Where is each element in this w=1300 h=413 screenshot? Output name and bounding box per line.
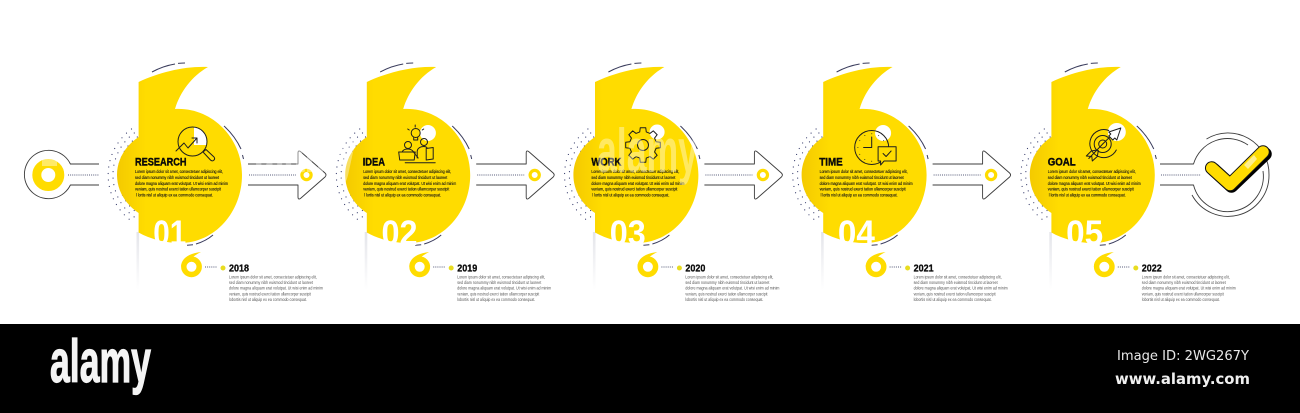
body text: Lorem ipsum dolor sit amet, consectetuer adipiscing elit, <box>820 169 908 174</box>
panel: work <box>565 63 782 302</box>
number: 01 <box>153 214 186 253</box>
small six marker <box>409 252 454 274</box>
heading: WORK <box>591 156 621 168</box>
heading: TIME <box>819 156 843 168</box>
dotted arcs <box>1021 129 1050 221</box>
description: Lorem ipsum dolor sit amet, consectetuer adipiscing elit, <box>685 274 773 279</box>
description: Lorem ipsum dolor sit amet, consectetuer adipiscing elit, <box>457 274 545 279</box>
dotted arcs <box>793 129 822 221</box>
footer logo: alamy <box>50 328 151 395</box>
description <box>229 274 323 302</box>
description: sed diam nonummy nibh euismod tincidunt ut laoreet <box>914 280 998 285</box>
yellow speech shape <box>117 67 242 243</box>
accent arcs <box>152 63 244 245</box>
website: www.alamy.com <box>1115 370 1250 388</box>
panel: time <box>793 63 1011 302</box>
arrow <box>933 151 1011 199</box>
body text: sed diam nonummy nibh euismod tincidunt ut laoreet <box>591 175 676 180</box>
watermark: alamy <box>597 117 698 186</box>
description: veniam, quis nostrud exerci tation ullamcorper suscipit <box>914 291 996 296</box>
accent arcs <box>837 63 928 245</box>
description: Lorem ipsum dolor sit amet, consectetuer adipiscing elit, <box>914 274 1002 279</box>
panel: research <box>108 63 326 302</box>
body text: dolore magna aliquam erat volutpat. Ut wisi enim ad minim <box>363 181 456 186</box>
body text: l lortis nisl ut aliquip ex ea commodo consequat. <box>1049 192 1126 197</box>
description: dolore magna aliquam erat volutpat. Ut wisi enim ad minim <box>685 286 780 291</box>
description: Lorem ipsum dolor sit amet, consectetuer adipiscing elit, <box>229 274 317 279</box>
body text: l lortis nisl ut aliquip ex ea commodo consequat. <box>364 192 441 197</box>
description: veniam, quis nostrud exerci tation ullamcorper suscipit <box>229 291 312 296</box>
description: dolore magna aliquam erat volutpat. Ut wisi enim ad minim <box>1142 286 1236 291</box>
body text <box>135 169 228 197</box>
year: 2020 <box>685 264 706 274</box>
year: 2021 <box>914 264 934 274</box>
icon: clock with chat check <box>855 125 896 165</box>
fading edge shadow <box>593 232 596 290</box>
number: 05 <box>1066 214 1103 253</box>
accent arcs <box>608 63 700 245</box>
description: sed diam nonummy nibh euismod tincidunt ut laoreet <box>457 280 542 285</box>
yellow speech shape <box>345 67 470 243</box>
end node: check mark <box>1160 133 1269 216</box>
accent arcs <box>380 63 472 245</box>
description: Lorem ipsum dolor sit amet, consectetuer adipiscing elit, <box>1142 274 1230 279</box>
yellow speech shape <box>802 67 927 243</box>
description: veniam, quis nostrud exerci tation ullamcorper suscipit <box>1142 291 1224 296</box>
year: 2022 <box>1142 264 1162 274</box>
start node <box>24 150 99 199</box>
body text: sed diam nonummy nibh euismod tincidunt ut laoreet <box>363 175 448 180</box>
description <box>457 274 552 302</box>
arrow <box>248 151 326 199</box>
body text: Lorem ipsum dolor sit amet, consectetuer adipiscing elit, <box>591 169 679 174</box>
icon: team with idea bulb <box>399 125 436 163</box>
description: veniam, quis nostrud exerci tation ullamcorper suscipit <box>685 291 768 296</box>
dotted arcs <box>108 129 137 221</box>
year: 2018 <box>229 264 249 274</box>
icon: magnifier with chart <box>176 127 215 161</box>
body text <box>820 169 913 197</box>
body text: sed diam nonummy nibh euismod tincidunt ut laoreet <box>1048 175 1132 180</box>
body text <box>591 169 685 197</box>
arrow <box>476 151 554 199</box>
year: 2019 <box>457 264 478 274</box>
number: 03 <box>610 214 646 253</box>
fading edge shadow <box>136 232 139 290</box>
body text: l lortis nisl ut aliquip ex ea commodo consequat. <box>592 192 669 197</box>
arrow <box>704 151 782 199</box>
description: lobortis nisl ut aliquip ex ea commodo consequat. <box>457 297 535 302</box>
description <box>1142 274 1236 302</box>
body text: dolore magna aliquam erat volutpat. Ut wisi enim ad minim <box>135 181 228 186</box>
yellow speech shape <box>1030 67 1155 243</box>
heading: GOAL <box>1048 156 1076 168</box>
description: lobortis nisl ut aliquip ex ea commodo consequat. <box>1142 297 1220 302</box>
body text: dolore magna aliquam erat volutpat. Ut wisi enim ad minim <box>1048 181 1141 186</box>
number: 04 <box>838 214 875 253</box>
yellow speech shape <box>573 67 698 243</box>
description <box>914 274 1008 302</box>
number: 02 <box>382 214 418 253</box>
heading: IDEA <box>363 156 385 168</box>
description: lobortis nisl ut aliquip ex ea commodo consequat. <box>685 297 763 302</box>
icon: gear <box>626 124 665 162</box>
body text: veniam, quis nostrud exerci tation ullamcorper suscipit <box>363 186 450 192</box>
description: veniam, quis nostrud exerci tation ullamcorper suscipit <box>457 291 540 296</box>
small six marker <box>181 252 226 274</box>
body text <box>363 169 456 197</box>
accent arcs <box>1065 63 1156 245</box>
description: dolore magna aliquam erat volutpat. Ut wisi enim ad minim <box>229 286 323 291</box>
watermark <box>255 117 698 186</box>
background <box>0 0 1300 324</box>
description: sed diam nonummy nibh euismod tincidunt ut laoreet <box>229 280 314 285</box>
footer bar <box>0 324 1300 413</box>
body text: veniam, quis nostrud exerci tation ullamcorper suscipit <box>135 186 222 192</box>
body text: veniam, quis nostrud exerci tation ullamcorper suscipit <box>591 186 678 192</box>
panel: goal <box>1021 63 1236 302</box>
heading: RESEARCH <box>135 156 187 168</box>
description: lobortis nisl ut aliquip ex ea commodo consequat. <box>914 297 992 302</box>
body text: veniam, quis nostrud exerci tation ullamcorper suscipit <box>1048 186 1134 192</box>
description: sed diam nonummy nibh euismod tincidunt ut laoreet <box>1142 280 1227 285</box>
image id: Image ID: 2WG267Y <box>1117 348 1250 364</box>
description: dolore magna aliquam erat volutpat. Ut wisi enim ad minim <box>914 286 1008 291</box>
description: dolore magna aliquam erat volutpat. Ut wisi enim ad minim <box>457 286 552 291</box>
fading edge shadow <box>1049 232 1052 290</box>
body text: l lortis nisl ut aliquip ex ea commodo consequat. <box>136 192 213 197</box>
body text: veniam, quis nostrud exerci tation ullamcorper suscipit <box>820 186 906 192</box>
dotted arcs <box>565 129 594 221</box>
panel: idea <box>336 63 554 302</box>
body text: dolore magna aliquam erat volutpat. Ut wisi enim ad minim <box>591 181 685 186</box>
small six marker <box>637 252 682 274</box>
body text: l lortis nisl ut aliquip ex ea commodo consequat. <box>821 192 898 197</box>
body text: sed diam nonummy nibh euismod tincidunt ut laoreet <box>820 175 904 180</box>
fading edge shadow <box>365 232 367 290</box>
small six marker <box>1094 252 1138 274</box>
body text: Lorem ipsum dolor sit amet, consectetuer adipiscing elit, <box>363 169 451 174</box>
description: lobortis nisl ut aliquip ex ea commodo consequat. <box>229 297 307 302</box>
body text: dolore magna aliquam erat volutpat. Ut wisi enim ad minim <box>820 181 913 186</box>
small six marker <box>866 252 910 274</box>
description: sed diam nonummy nibh euismod tincidunt ut laoreet <box>685 280 770 285</box>
body text: Lorem ipsum dolor sit amet, consectetuer adipiscing elit, <box>1048 169 1136 174</box>
description <box>685 274 780 302</box>
fading edge shadow <box>821 232 824 290</box>
body text: sed diam nonummy nibh euismod tincidunt ut laoreet <box>135 175 220 180</box>
dotted arcs <box>336 129 366 221</box>
body text <box>1048 169 1141 197</box>
watermark: alamy <box>255 117 356 186</box>
icon: target with arrow <box>1086 123 1126 161</box>
body text: Lorem ipsum dolor sit amet, consectetuer adipiscing elit, <box>135 169 223 174</box>
